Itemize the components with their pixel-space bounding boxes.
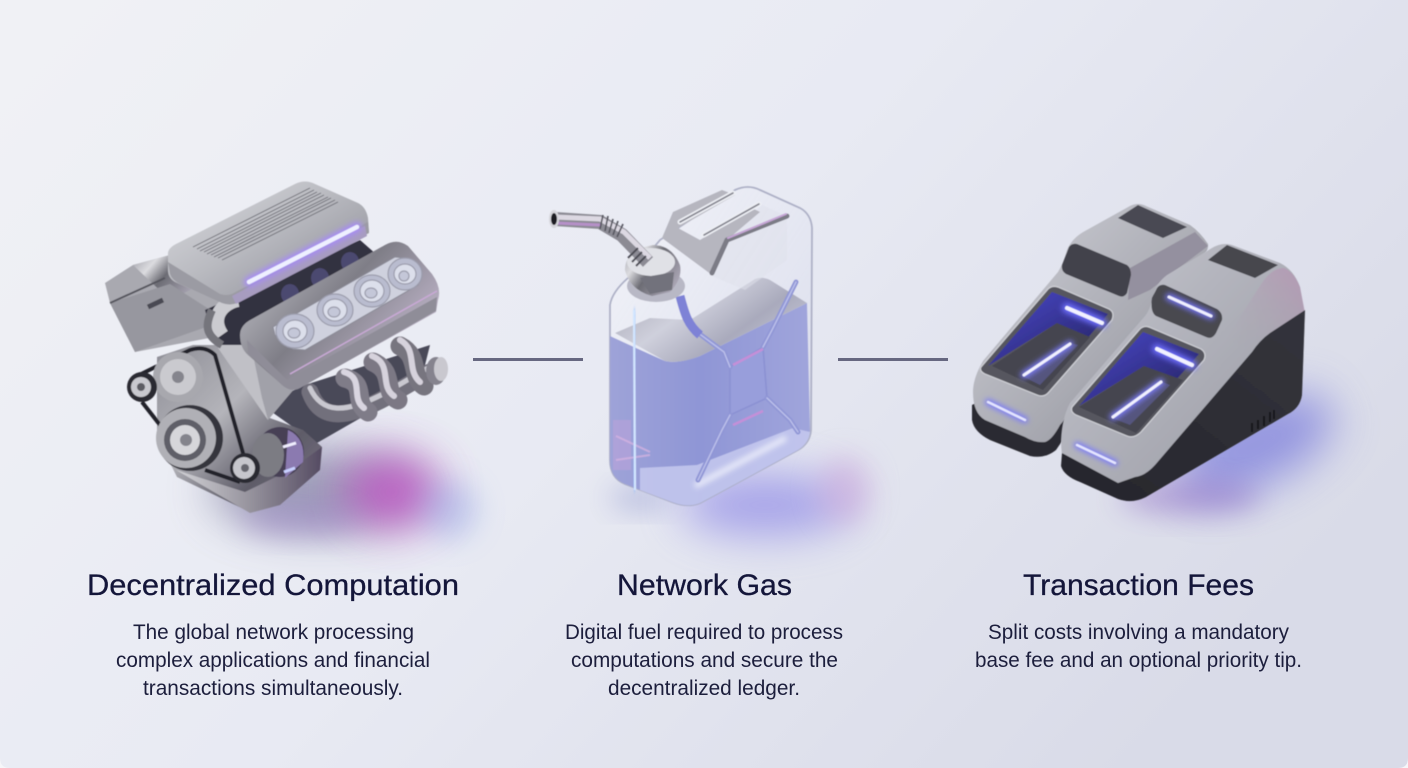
fuel surface (615, 278, 807, 362)
dark area behind manifold (262, 345, 430, 447)
description: decentralized computation: complex applications and financial (116, 649, 430, 672)
panel: decentralized computation (87, 182, 478, 700)
glow strip on top cover (249, 227, 357, 282)
description: network gas: Digital fuel required to process (565, 621, 843, 644)
description: transaction fees (975, 621, 1302, 672)
left base (972, 390, 1090, 457)
right shell (1061, 244, 1305, 500)
description: decentralized computation: transactions simultaneously. (143, 677, 403, 700)
nozzle spout (555, 215, 650, 266)
glowing edge line (634, 310, 635, 490)
left reflection (613, 420, 650, 470)
description: transaction fees: base fee and an optional priority tip. (975, 649, 1302, 672)
front valve cover (240, 242, 439, 390)
left tray (980, 286, 1113, 396)
manifold end cap (426, 357, 448, 385)
heading: decentralized computation: Decentralized Computation (87, 569, 459, 602)
handle (662, 190, 787, 290)
dark valley (205, 240, 385, 345)
fuel liquid (610, 303, 810, 505)
spout opening (549, 210, 559, 228)
description: decentralized computation: The global network processing (133, 621, 414, 644)
engine block (157, 345, 322, 512)
icon: engine (105, 182, 448, 513)
right top dark panel (1208, 245, 1278, 278)
description: network gas: computations and secure the (571, 649, 838, 672)
cover ribs (193, 188, 338, 260)
can glass body (610, 187, 812, 505)
arrow: connector two (838, 358, 948, 361)
terminal shadow glow (1120, 373, 1349, 517)
right dark side (1061, 310, 1305, 501)
icon: right fee terminal (1061, 244, 1305, 501)
oil pan (176, 447, 322, 513)
engine back timing block (105, 255, 232, 352)
blue pipe (680, 296, 700, 335)
left top dark panel (1118, 205, 1187, 238)
embossed X panel (697, 282, 798, 480)
drive belt (133, 348, 245, 482)
pulleys (127, 352, 304, 483)
description: transaction fees: Split costs involving a mandatory (988, 621, 1289, 644)
panel: transaction fees (972, 204, 1349, 672)
heading: network gas: Network Gas (617, 569, 792, 602)
right display panel (1152, 285, 1222, 338)
right tray light strips (1077, 349, 1192, 463)
heading: transaction fees: Transaction Fees (1023, 569, 1254, 602)
description: decentralized computation (116, 621, 430, 700)
cylinder windows (276, 258, 422, 348)
icon: left fee terminal (972, 204, 1208, 457)
vents (1252, 410, 1274, 432)
left display panel (1062, 244, 1131, 297)
pink sheen on shell (1225, 268, 1305, 352)
description: network gas: decentralized ledger. (608, 677, 800, 700)
description: network gas (565, 621, 843, 700)
engine shadow glow (210, 448, 478, 540)
icon: jerry can (549, 187, 812, 505)
right tray (1072, 326, 1205, 437)
exhaust manifold (310, 340, 430, 414)
jerry can shadow glow (610, 456, 871, 535)
left shell (973, 204, 1208, 442)
lower clear base (640, 428, 810, 505)
top valve cover (168, 182, 369, 304)
nozzle collar (625, 245, 685, 302)
panel: network gas (549, 187, 871, 700)
left tray light strips (988, 308, 1102, 420)
arrow: connector one (473, 358, 583, 361)
